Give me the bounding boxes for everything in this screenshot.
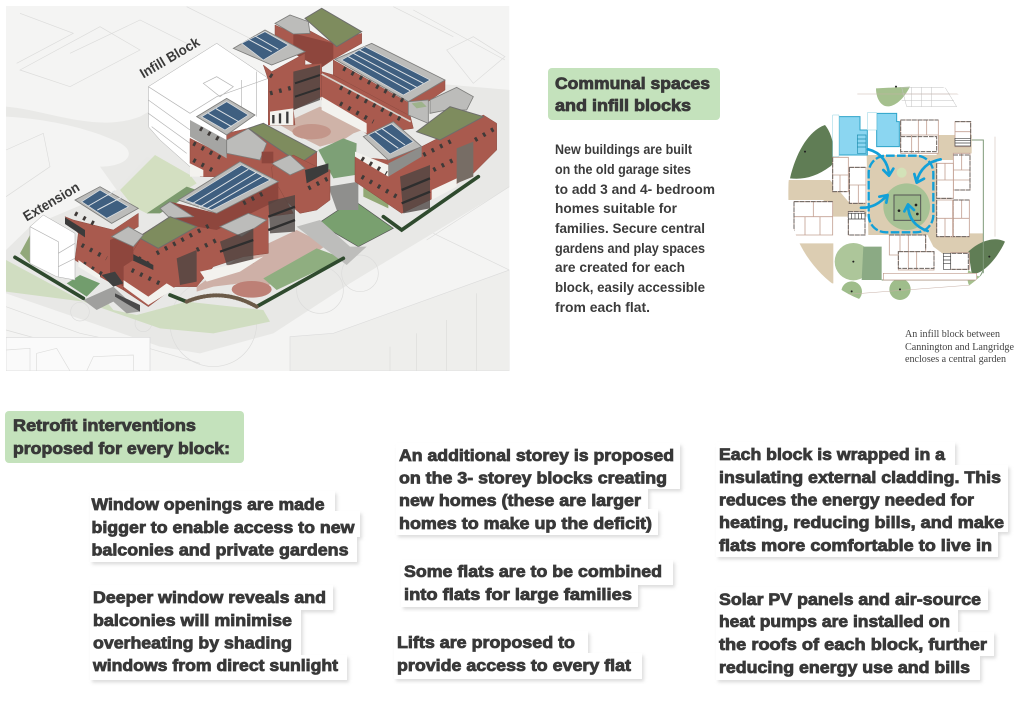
caption: infill block: encloses a central garden — [905, 354, 1006, 365]
heading: retrofit interventions: Retrofit interventions — [13, 417, 196, 435]
text block: window openings: Window openings are made — [92, 496, 324, 514]
caption: infill block: An infill block between — [905, 329, 1000, 340]
middle block with solar panels — [190, 98, 330, 213]
text block: communal spaces description: are created for each — [555, 259, 685, 275]
text block: solar PV and heat pumps: Solar PV panels and air-source — [719, 591, 981, 609]
text block: deeper window reveals: windows from direct sunlight — [92, 657, 339, 675]
long north block with solar panels — [322, 43, 445, 135]
trees and planting — [790, 125, 834, 179]
heading: communal spaces and infill blocks: and infill blocks — [555, 97, 691, 115]
text block: window openings: bigger to enable access to new — [92, 519, 355, 537]
caption: infill block — [905, 329, 1015, 365]
hedges — [15, 177, 478, 307]
heading: retrofit interventions: proposed for every block: — [13, 440, 230, 458]
aerial axonometric view of the housing blocks — [6, 6, 510, 371]
text block: communal spaces description: homes suitable for — [555, 200, 678, 216]
text block: combined flats — [401, 560, 673, 607]
upper-left wing with solar panels — [233, 30, 322, 125]
east block with solar panels — [355, 87, 497, 213]
text block: solar PV and heat pumps: heat pumps are installed on — [719, 613, 950, 631]
text block: lifts: provide access to every flat — [397, 657, 632, 675]
text block: window openings: balconies and private gardens — [92, 542, 348, 560]
text block: external cladding: reduces the energy needed for — [719, 492, 975, 510]
text block: external cladding: flats more comfortable to live in — [719, 537, 992, 555]
text block: deeper window reveals: overheating by shading — [93, 634, 292, 652]
text block: lifts — [394, 631, 642, 679]
text block: additional storey: An additional storey is proposed — [399, 447, 674, 465]
circular plan of infill block and central garden — [788, 86, 1005, 300]
text block: external cladding: heating, reducing bills, and make — [719, 514, 1004, 532]
text block: solar PV and heat pumps: reducing energy use and bills — [719, 659, 970, 677]
central garden — [883, 183, 930, 230]
text block: communal spaces description: families. Secure central — [555, 220, 705, 236]
text block: solar PV and heat pumps: the roofs of each block, further — [719, 636, 988, 654]
text block: communal spaces description: gardens and play spaces — [555, 240, 705, 256]
text block: external cladding: Each block is wrapped in a — [719, 446, 946, 464]
text block: deeper window reveals — [90, 585, 347, 680]
heading: communal spaces and infill blocks: Communal spaces — [555, 75, 710, 93]
text block: deeper window reveals: Deeper window reveals and — [93, 589, 326, 607]
ground and paths — [788, 135, 983, 283]
lawns and paving — [6, 107, 393, 333]
text block: communal spaces description: on the old garage sites — [555, 161, 691, 177]
label: Infill Block: Infill Block — [137, 34, 202, 81]
text block: combined flats: Some flats are to be combined — [404, 563, 662, 581]
extension block outline — [30, 215, 75, 280]
text block: external cladding — [716, 442, 1008, 557]
new infill blocks in blue — [839, 117, 867, 155]
grid on north lawn — [902, 87, 957, 107]
flats floor plan — [901, 120, 938, 153]
text block: combined flats: into flats for large families — [404, 586, 632, 604]
central long block with solar panels — [115, 162, 295, 312]
dashed circulation route and blue arrows — [861, 149, 941, 232]
text block: window openings — [90, 491, 360, 562]
text block: communal spaces description — [555, 141, 715, 315]
text block: additional storey: on the 3- storey blocks creating — [399, 470, 667, 488]
caption: infill block: Cannington and Langridge — [905, 342, 1015, 353]
label: Extension: Extension — [20, 179, 82, 224]
text block: additional storey — [396, 443, 680, 535]
text block: additional storey: new homes (these are larger — [399, 492, 642, 510]
infill block outline — [148, 43, 268, 167]
north wing with green roof — [275, 8, 362, 68]
text block: communal spaces description: block, easily accessible — [555, 279, 705, 295]
text block: additional storey: homes to make up the deficit) — [399, 515, 652, 533]
surrounding streets and context outlines — [6, 7, 510, 371]
heading: retrofit interventions — [5, 411, 244, 463]
text block: deeper window reveals: balconies will minimise — [93, 612, 292, 630]
heading: communal spaces and infill blocks — [548, 68, 720, 120]
text block: external cladding: insulating external cladding. This — [719, 469, 1001, 487]
text block: communal spaces description: to add 3 and 4- bedroom — [555, 181, 715, 197]
text block: solar PV and heat pumps — [716, 587, 994, 680]
west block with solar panels — [65, 187, 143, 290]
text block: communal spaces description: from each flat. — [555, 299, 650, 315]
text block: communal spaces description: New buildings are built — [555, 141, 692, 157]
text block: lifts: Lifts are proposed to — [397, 634, 575, 652]
